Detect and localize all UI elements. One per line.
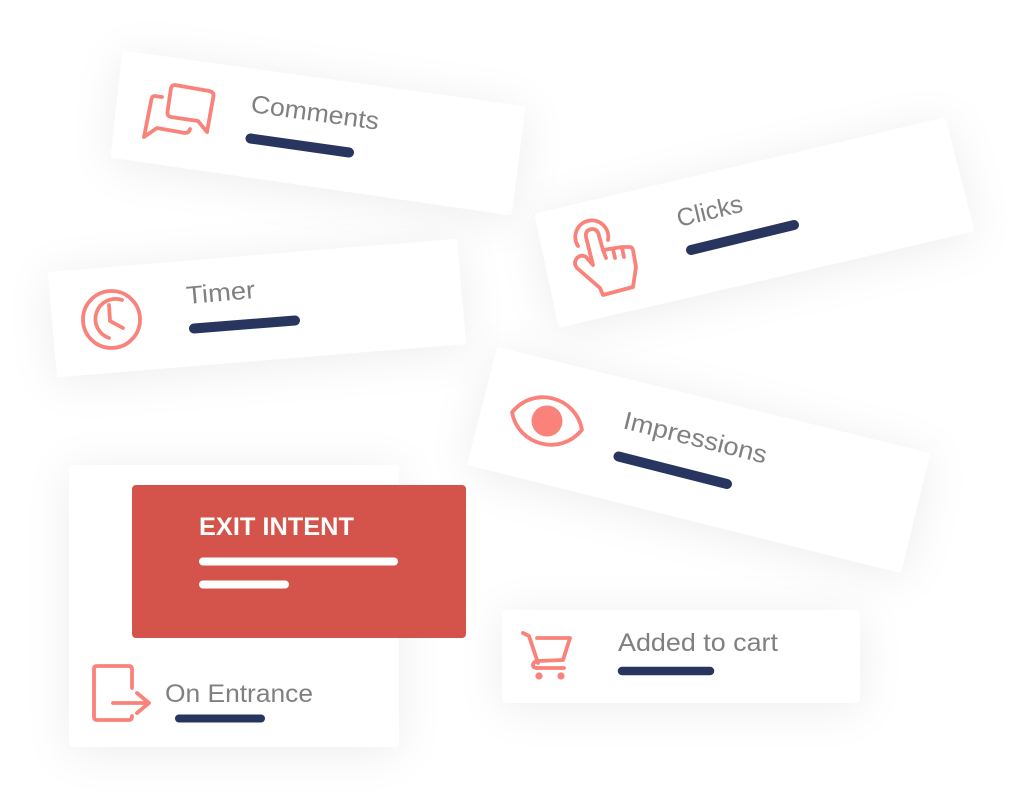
label: comments: Comments (249, 90, 381, 136)
bar: white short (203, 580, 285, 588)
panel: timer (50, 241, 464, 375)
panel: added to cart (502, 610, 860, 703)
label: clicks: Clicks (674, 190, 746, 233)
icon: exit door (94, 666, 149, 720)
bar: clicks (691, 225, 794, 250)
bar: white long (203, 558, 394, 566)
bar: comments (250, 138, 349, 152)
bar: added to cart (622, 667, 710, 675)
bar: impressions (618, 456, 727, 484)
panel: comments (114, 54, 522, 212)
label: timer: Timer (185, 276, 256, 310)
bar: on entrance (179, 714, 261, 722)
icon: clock (83, 291, 140, 348)
icon: pointing hand (575, 220, 636, 295)
panel: on entrance (69, 465, 399, 747)
icon: eye (506, 390, 588, 452)
panel: exit intent (132, 485, 466, 638)
bar: timer (194, 320, 295, 328)
panel: clicks (538, 121, 971, 324)
panel: impressions (470, 350, 927, 570)
label: impressions: Impressions (621, 407, 770, 469)
label: on entrance: On Entrance (165, 680, 313, 708)
icon: speech bubbles (144, 85, 214, 137)
label: added to cart: Added to cart (618, 629, 778, 657)
icon: cart (523, 633, 570, 680)
heading: exit intent: EXIT INTENT (199, 513, 354, 541)
